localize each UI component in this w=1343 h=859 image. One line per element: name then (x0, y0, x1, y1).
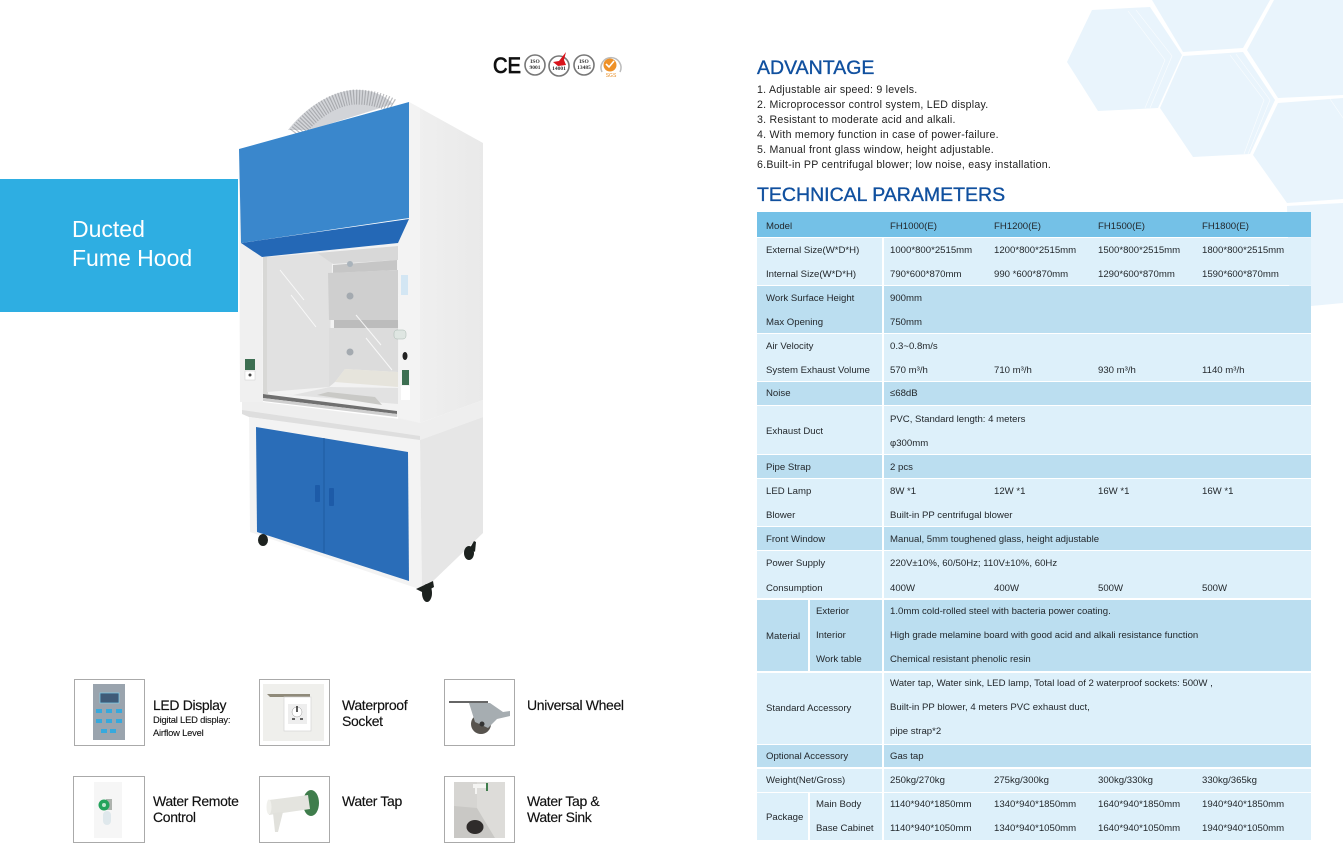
label: Water Sink (527, 809, 591, 825)
label: Control (153, 809, 196, 825)
row: pipe strap (757, 455, 1311, 478)
certification marks: ISO (530, 59, 540, 65)
certification marks: 14001 (552, 66, 566, 72)
advantage list (757, 84, 1051, 171)
row: model: FH1000(E) (890, 221, 937, 232)
row: size: 1590*600*870mm (1202, 269, 1279, 280)
row: front window: Front Window (766, 534, 825, 545)
row: standard accessory: Standard Accessory (766, 703, 851, 714)
row: LED lamp: 16W *1 (1098, 486, 1129, 497)
row: size: 1800*800*2515mm (1202, 245, 1284, 256)
row: air velocity: 1140 m³/h (1202, 365, 1244, 376)
label: Digital LED display: (153, 714, 230, 725)
lower blue lip (241, 219, 409, 257)
row: size: 1290*600*870mm (1098, 269, 1175, 280)
label: Airflow Level (153, 727, 204, 738)
row: air velocity: Air Velocity (766, 341, 813, 352)
feature: waterproof socket (259, 679, 408, 746)
row: package: Base Cabinet (816, 823, 874, 834)
row: pipe strap: 2 pcs (890, 462, 913, 473)
row: size: External Size(W*D*H) (766, 245, 859, 256)
row: package: 1340*940*1850mm (994, 799, 1076, 810)
row: model: FH1800(E) (1202, 221, 1249, 232)
row: material: Exterior (816, 606, 849, 617)
advantage list: 5. Manual front glass window, height adjustable. (757, 144, 994, 156)
row: standard accessory: Water tap, Water sink, LED lamp, Total load of 2 waterproof sockets: 500W , (890, 678, 1213, 689)
base side (420, 417, 483, 590)
row: model (757, 212, 1311, 237)
glass opening and interior (262, 243, 400, 417)
row: material (757, 600, 1311, 671)
row: noise: ≤68dB (890, 388, 918, 399)
label: LED Display (153, 697, 226, 713)
row: weight: 330kg/365kg (1202, 775, 1257, 786)
row: pipe strap: Pipe Strap (766, 462, 811, 473)
row: optional accessory: Gas tap (890, 751, 924, 762)
row: size: 1000*800*2515mm (890, 245, 972, 256)
row: model: Model (766, 221, 792, 232)
certification marks: 13485 (577, 65, 591, 71)
row: package: Package (766, 812, 803, 823)
row: air velocity: 930 m³/h (1098, 365, 1136, 376)
row: package: Main Body (816, 799, 861, 810)
cabinet doors (256, 427, 409, 581)
row: power: 500W (1098, 583, 1123, 594)
feature: water tap (259, 776, 402, 843)
row: package: 1340*940*1050mm (994, 823, 1076, 834)
row: size: 790*600*870mm (890, 269, 961, 280)
row: work surface: Max Opening (766, 317, 823, 328)
row: exhaust duct: Exhaust Duct (766, 426, 823, 437)
advantage list: 4. With memory function in case of power-failure. (757, 129, 999, 141)
row: weight: Weight(Net/Gross) (766, 775, 845, 786)
row: size: 990 *600*870mm (994, 269, 1068, 280)
row: front window (757, 527, 1311, 550)
feature: LED display (74, 679, 230, 746)
certification marks (493, 52, 622, 79)
icon: socket (259, 679, 330, 746)
certification marks: SGS (606, 73, 617, 79)
row: material: 1.0mm cold-rolled steel with bacteria power coating. (890, 606, 1111, 617)
row: weight: 275kg/300kg (994, 775, 1049, 786)
row: material: Work table (816, 654, 862, 665)
row: power: 220V±10%, 60/50Hz; 110V±10%, 60Hz (890, 558, 1057, 569)
row: package: 1140*940*1850mm (890, 799, 971, 810)
row: standard accessory: pipe strap*2 (890, 726, 941, 737)
background hexagons (1067, 0, 1343, 306)
label (342, 697, 408, 729)
label (527, 793, 600, 825)
casters (258, 534, 476, 602)
row: model: FH1200(E) (994, 221, 1041, 232)
row: power: Power Supply (766, 558, 825, 569)
feature: water tap and sink (444, 776, 600, 843)
label: Socket (342, 713, 383, 729)
row: work surface (757, 286, 1311, 333)
row: package: 1640*940*1850mm (1098, 799, 1180, 810)
cabinet side panel (398, 102, 483, 423)
icon: sink (444, 776, 515, 843)
row: exhaust duct: PVC, Standard length: 4 meters (890, 414, 1025, 425)
row: package (757, 793, 1311, 840)
row: LED lamp: Built-in PP centrifugal blower (890, 510, 1012, 521)
fume hood illustration (239, 90, 483, 602)
row: exhaust duct (757, 406, 1311, 454)
title (72, 216, 192, 271)
label: Water Remote (153, 793, 239, 809)
row: package: 1640*940*1050mm (1098, 823, 1180, 834)
row: power (757, 551, 1311, 598)
upper blue panel (239, 102, 409, 243)
row: air velocity: 0.3~0.8m/s (890, 341, 938, 352)
row: air velocity (757, 334, 1311, 381)
row: size: 1500*800*2515mm (1098, 245, 1180, 256)
row: work surface: 900mm (890, 293, 922, 304)
advantage list: 6.Built-in PP centrifugal blower; low noise, easy installation. (757, 159, 1051, 171)
row: standard accessory: Built-in PP blower, 4 meters PVC exhaust duct, (890, 702, 1090, 713)
label: Water Tap & (527, 793, 599, 809)
row: LED lamp: Blower (766, 510, 795, 521)
title: Ducted (72, 216, 145, 242)
icon: remote knob (73, 776, 145, 843)
row: noise (757, 382, 1311, 405)
row: optional accessory (757, 745, 1311, 767)
row: size: Internal Size(W*D*H) (766, 269, 856, 280)
row: work surface: 750mm (890, 317, 922, 328)
advantage list: 2. Microprocessor control system, LED display. (757, 99, 988, 111)
row: air velocity: 710 m³/h (994, 365, 1032, 376)
right controls (394, 275, 410, 400)
blue title band (0, 179, 238, 312)
row: size (757, 238, 1311, 285)
row: exhaust duct: φ300mm (890, 438, 928, 449)
row: material: Material (766, 631, 800, 642)
row: weight: 300kg/330kg (1098, 775, 1153, 786)
row: optional accessory: Optional Accessory (766, 751, 848, 762)
label (153, 697, 230, 738)
row: package: 1940*940*1050mm (1202, 823, 1284, 834)
row: noise: Noise (766, 388, 791, 399)
left controls (245, 359, 255, 380)
row: power: 400W (890, 583, 915, 594)
row: LED lamp: 12W *1 (994, 486, 1025, 497)
row: air velocity: 570 m³/h (890, 365, 928, 376)
base front (249, 417, 422, 590)
certification marks: CE (493, 53, 521, 78)
row: material: Interior (816, 630, 846, 641)
base top slab (242, 400, 483, 440)
label: Water Tap (342, 793, 402, 809)
row: weight (757, 769, 1311, 792)
certification marks: 9001 (530, 65, 541, 71)
row: weight: 250kg/270kg (890, 775, 945, 786)
row: model: FH1500(E) (1098, 221, 1145, 232)
row: LED lamp: 16W *1 (1202, 486, 1233, 497)
row: package: 1140*940*1050mm (890, 823, 971, 834)
label (153, 793, 239, 825)
row: package: 1940*940*1850mm (1202, 799, 1284, 810)
advantage list: 1. Adjustable air speed: 9 levels. (757, 84, 917, 96)
certification marks: ISO (579, 59, 589, 65)
row: LED lamp (757, 479, 1311, 526)
icon: caster (444, 679, 515, 746)
advantage list: 3. Resistant to moderate acid and alkali. (757, 114, 956, 126)
row: LED lamp: 8W *1 (890, 486, 916, 497)
row: power: 500W (1202, 583, 1227, 594)
row: power: 400W (994, 583, 1019, 594)
label: Waterproof (342, 697, 407, 713)
heading: technical parameters: TECHNICAL PARAMETERS (757, 184, 1005, 206)
row: standard accessory (757, 673, 1311, 744)
row: material: Chemical resistant phenolic resin (890, 654, 1031, 665)
title: Fume Hood (72, 245, 192, 271)
row: work surface: Work Surface Height (766, 293, 854, 304)
icon: tap (259, 776, 330, 843)
row: size: 1200*800*2515mm (994, 245, 1076, 256)
heading: advantage: ADVANTAGE (757, 57, 874, 79)
row: front window: Manual, 5mm toughened glass, height adjustable (890, 534, 1099, 545)
left front pillar (239, 149, 263, 402)
label: Universal Wheel (527, 697, 624, 713)
row: air velocity: System Exhaust Volume (766, 365, 870, 376)
feature: universal wheel (444, 679, 624, 746)
feature: water remote control (73, 776, 239, 843)
row: power: Consumption (766, 583, 823, 594)
exhaust duct (288, 90, 393, 134)
icon: LED panel (74, 679, 145, 746)
row: material: High grade melamine board with good acid and alkali resistance function (890, 630, 1198, 641)
row: LED lamp: LED Lamp (766, 486, 811, 497)
